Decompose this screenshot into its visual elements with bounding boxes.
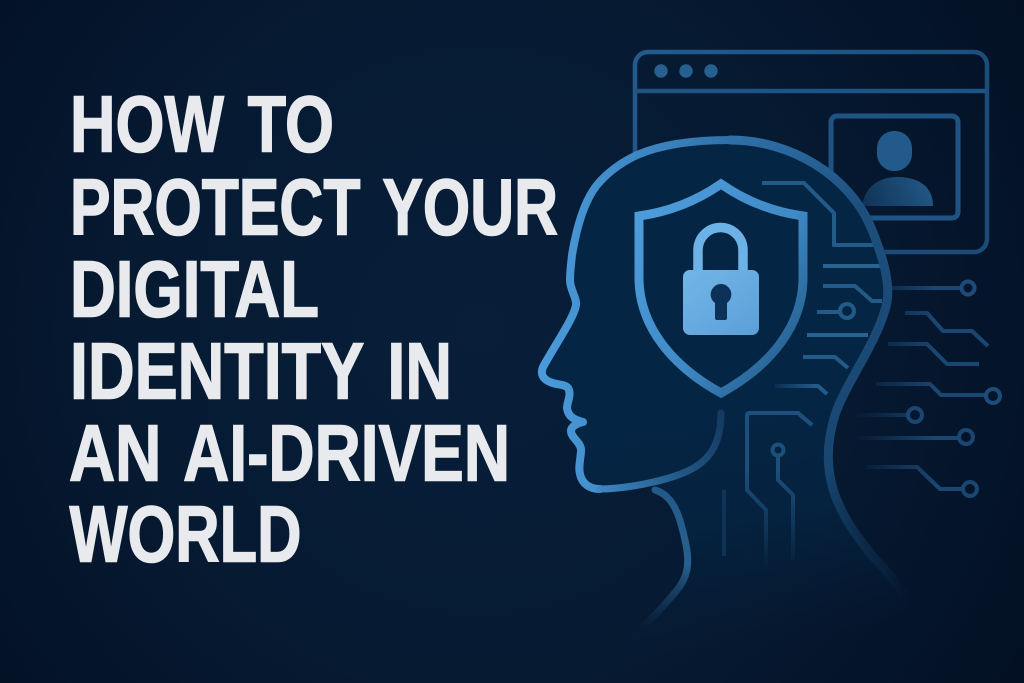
title: IDENTITY IN: [70, 326, 452, 416]
face profile: [542, 140, 730, 489]
front of neck: [643, 490, 688, 627]
keyhole: [711, 284, 731, 320]
title: WORLD: [70, 490, 302, 578]
title: AN AI-DRIVEN: [69, 408, 510, 498]
padlock shackle: [698, 228, 743, 274]
profile shoulders icon: [862, 177, 933, 206]
shield: [639, 184, 803, 393]
head outline: [542, 140, 912, 627]
profile card: [831, 116, 958, 218]
title: DIGITAL: [70, 244, 319, 334]
profile head icon: [877, 131, 912, 171]
padlock: [683, 228, 759, 335]
title: [69, 80, 558, 578]
title: HOW TO: [70, 80, 334, 168]
circuit traces: outside head: [850, 282, 1000, 496]
padlock body: [683, 270, 759, 335]
circuit traces: inside head: [724, 183, 882, 570]
browser window: [635, 52, 987, 252]
head silhouette fill: [542, 140, 935, 650]
window header divider: [635, 89, 987, 93]
title: PROTECT YOUR: [70, 162, 558, 252]
back of head and neck: [730, 140, 912, 605]
window control dots: [654, 64, 718, 78]
jaw line: [600, 413, 721, 489]
window frame: [635, 52, 987, 252]
